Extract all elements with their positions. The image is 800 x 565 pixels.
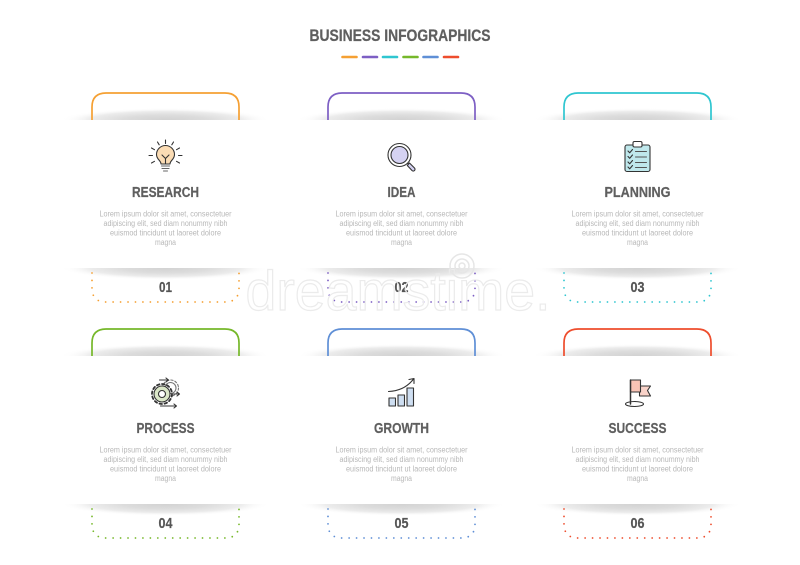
body text: euismod tincidunt ut laoreet dolore [346,228,457,238]
icon: clipboard [625,142,650,172]
number: 06 [630,516,644,532]
body text: Lorem ipsum dolor sit amet, consectetuer [572,446,704,454]
icon: light bulb [149,140,182,171]
body text: adipiscing elit, sed diam nonummy nibh [104,455,228,464]
bottom dotted arch [564,273,711,302]
heading: IDEA [388,185,416,201]
heading: SUCCESS [608,421,667,437]
body text: Lorem ipsum dolor sit amet, consectetuer [100,446,232,454]
bottom dotted arch [92,273,239,302]
body text [572,210,704,247]
panel: research [60,93,270,302]
body text [336,210,468,247]
heading: PROCESS [136,421,195,437]
body text: magna [627,238,648,247]
bottom dotted arch [564,509,711,538]
icon: magnifying glass [388,144,415,171]
body text [336,446,468,483]
top arch [328,93,475,120]
watermark: dreamstime. [246,259,550,322]
number: 02 [394,280,408,296]
body text: magna [155,238,176,247]
bottom dotted arch [328,273,475,302]
number: 04 [158,516,172,532]
panel: success [532,329,742,538]
bottom dotted arch [92,509,239,538]
heading: PLANNING [604,185,670,201]
bottom dotted arch [328,509,475,538]
body text: magna [627,474,648,483]
panel: idea [296,93,506,302]
body text: magna [155,474,176,483]
icon: gears and arrows [152,378,180,408]
top arch [564,93,711,120]
number: 03 [630,280,644,296]
body text: adipiscing elit, sed diam nonummy nibh [576,219,700,228]
body text: adipiscing elit, sed diam nonummy nibh [576,455,700,464]
body text: Lorem ipsum dolor sit amet, consectetuer [100,210,232,218]
top arch [92,329,239,356]
title colour dashes [342,56,458,58]
icon: flag [626,380,650,406]
panel: planning [532,93,742,302]
heading: GROWTH [374,421,429,437]
body text: magna [391,474,412,483]
body text: adipiscing elit, sed diam nonummy nibh [340,219,464,228]
body text: euismod tincidunt ut laoreet dolore [582,228,693,238]
body text: adipiscing elit, sed diam nonummy nibh [340,455,464,464]
body text: euismod tincidunt ut laoreet dolore [346,464,457,474]
body text: euismod tincidunt ut laoreet dolore [582,464,693,474]
body text: euismod tincidunt ut laoreet dolore [110,464,221,474]
body text: euismod tincidunt ut laoreet dolore [110,228,221,238]
body text: Lorem ipsum dolor sit amet, consectetuer [336,446,468,454]
body text [572,446,704,483]
body text [100,210,232,247]
title: BUSINESS INFOGRAPHICS [310,27,490,45]
body text: magna [391,238,412,247]
top arch [564,329,711,356]
body text: adipiscing elit, sed diam nonummy nibh [104,219,228,228]
top arch [328,329,475,356]
top arch [92,93,239,120]
body text [100,446,232,483]
panel: growth [296,329,506,538]
panel: process [60,329,270,538]
body text: Lorem ipsum dolor sit amet, consectetuer [336,210,468,218]
number: 01 [159,280,172,296]
number: 05 [394,516,408,532]
body text: Lorem ipsum dolor sit amet, consectetuer [572,210,704,218]
heading: RESEARCH [132,185,199,201]
icon: growth chart [388,378,414,406]
